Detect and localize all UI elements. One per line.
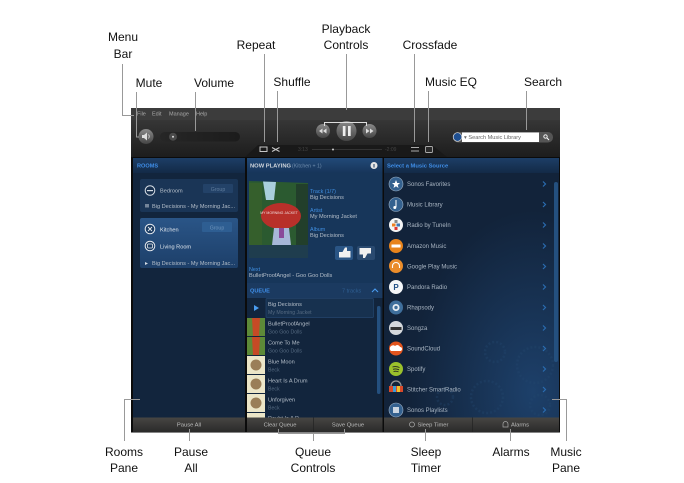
callout: sleep timer: Timer — [411, 461, 441, 475]
queue item: text: Come To Me — [268, 340, 300, 346]
next track — [249, 267, 333, 279]
track progress: -2:09 — [385, 147, 397, 153]
source list labels: Radio by TuneIn — [407, 223, 451, 229]
footer bar: Sleep Timer — [418, 422, 449, 428]
track details: Big Decisions — [310, 233, 344, 239]
callout: crossfade: Crossfade — [403, 38, 458, 52]
queue item: text: Goo Goo Dolls — [268, 330, 302, 336]
panel: music source pane — [384, 158, 559, 418]
panel: queue: 7 tracks — [342, 288, 362, 294]
callout: pause all: All — [184, 461, 198, 475]
queue item: text: Heart Is A Drum — [268, 378, 308, 384]
callout: pause all — [174, 429, 208, 475]
callout: sleep timer: Sleep — [411, 445, 442, 459]
callout: pause all: Pause — [174, 445, 208, 459]
playback controls — [316, 121, 376, 141]
room card: kitchen and living room: Big Decisions - My Morning Jac... — [152, 261, 235, 267]
track details: My Morning Jacket — [310, 214, 357, 220]
source list labels: SoundCloud — [407, 346, 440, 352]
source list labels: Google Play Music — [407, 264, 457, 270]
callout: alarms — [492, 429, 530, 459]
volume slider — [160, 132, 240, 142]
source list labels: Spotify — [407, 367, 425, 373]
callout: repeat: Repeat — [237, 38, 276, 52]
callout: shuffle: Shuffle — [273, 75, 311, 89]
menu bar: Edit — [152, 112, 162, 118]
room card: bedroom: Group — [211, 187, 225, 193]
icon: shuffle — [272, 148, 280, 152]
queue item: text: Unforgiven — [268, 398, 295, 404]
callout: menu bar — [108, 30, 138, 116]
thumbs buttons — [335, 246, 375, 260]
source list labels: Amazon Music — [407, 244, 446, 250]
callout: menu bar: Menu — [108, 30, 138, 44]
source list labels: Rhapsody — [407, 306, 434, 312]
callout: playback controls — [322, 22, 371, 126]
callout: sleep timer — [411, 429, 442, 475]
source list icons — [389, 177, 403, 417]
icon: music eq — [426, 146, 432, 152]
track details: Album — [310, 227, 326, 233]
queue item: text: Beck — [268, 406, 280, 412]
room card: kitchen and living room: Living Room — [160, 244, 191, 250]
source list labels: Stitcher SmartRadio — [407, 388, 461, 394]
callout: repeat — [237, 38, 276, 142]
room card: bedroom: Big Decisions - My Morning Jac... — [152, 204, 235, 210]
callout: shuffle — [273, 75, 311, 142]
panel: queue — [247, 283, 382, 422]
panel: music source pane: Select a Music Source — [387, 164, 449, 170]
footer bar — [133, 418, 559, 432]
callout: music pane: Music — [550, 445, 582, 459]
panel: now playing — [247, 158, 382, 283]
menu bar — [131, 108, 560, 120]
track details: Track (1/7) — [310, 189, 336, 195]
source list labels: Sonos Favorites — [407, 182, 450, 188]
next track: BulletProofAngel - Goo Goo Dolls — [249, 273, 333, 279]
menu bar: File — [137, 112, 146, 118]
app window — [131, 108, 560, 432]
callout: rooms pane — [105, 400, 143, 475]
callout: crossfade — [403, 38, 458, 142]
queue item: current: My Morning Jacket — [268, 310, 312, 316]
panel: queue: QUEUE — [250, 288, 270, 294]
callout: search: Search — [524, 75, 562, 89]
queue item: text: Goo Goo Dolls — [268, 348, 302, 354]
next track: Next — [249, 267, 261, 273]
source list labels: Pandora Radio — [407, 285, 448, 291]
source list chevrons — [543, 182, 546, 412]
track progress: 3:13 — [298, 147, 308, 153]
room card: kitchen and living room: Kitchen — [160, 228, 179, 234]
room card: kitchen and living room: Group — [210, 226, 224, 232]
queue item: current — [254, 298, 374, 318]
queue item: text: BulletProofAngel — [268, 322, 310, 328]
panel: now playing: (Kitchen + 1) — [292, 164, 322, 170]
track details: Artist — [310, 208, 323, 214]
source list labels: Sonos Playlists — [407, 408, 448, 414]
callout: volume: Volume — [194, 76, 234, 90]
callout: mute: Mute — [136, 76, 163, 90]
callout: search — [524, 75, 562, 130]
callout: rooms pane: Pane — [110, 461, 138, 475]
queue item: current: Big Decisions — [268, 302, 302, 308]
callout: playback controls: Controls — [324, 38, 368, 52]
icon: mute button — [138, 129, 154, 144]
source list icons: P — [393, 283, 399, 292]
callout: volume — [194, 76, 234, 131]
room card: kitchen and living room — [140, 218, 238, 268]
icon: repeat — [260, 147, 267, 152]
callout: playback controls: Playback — [322, 22, 371, 36]
room card: bedroom: Bedroom — [160, 188, 183, 194]
source list labels: Songza — [407, 326, 428, 332]
callout: music pane — [550, 400, 582, 475]
track progress — [298, 147, 397, 153]
callout: music eq: Music EQ — [425, 75, 477, 89]
callout: queue controls: Controls — [291, 461, 335, 475]
music source scrollbar — [554, 182, 558, 362]
callout: music pane: Pane — [552, 461, 580, 475]
callout: alarms: Alarms — [492, 445, 530, 459]
panel: rooms pane — [133, 158, 245, 418]
queue item: text — [268, 322, 310, 422]
menu bar: Help — [196, 112, 207, 118]
icon: crossfade — [411, 148, 419, 151]
source list labels — [407, 182, 461, 414]
footer bar: Alarms — [511, 422, 529, 428]
queue item: text: Beck — [268, 368, 280, 374]
queue item: text: Doubt Is A D — [268, 416, 299, 422]
queue scrollbar — [377, 306, 380, 394]
queue item: text: Blue Moon — [268, 360, 295, 366]
track details — [310, 189, 357, 239]
footer bar: Pause All — [177, 422, 201, 428]
callout: music eq — [425, 75, 477, 142]
callout: queue controls — [278, 429, 344, 475]
room card: bedroom — [140, 179, 238, 212]
toolbar — [131, 120, 560, 157]
callout: rooms pane: Rooms — [105, 445, 143, 459]
menu bar: Manage — [169, 112, 189, 118]
queue item: text: Beck — [268, 386, 280, 392]
search box — [453, 132, 553, 142]
queue item: thumbnails — [247, 318, 265, 418]
search box: ▾ Search Music Library — [464, 135, 521, 141]
footer bar: Clear Queue — [264, 422, 296, 428]
callout: queue controls: Queue — [295, 445, 331, 459]
album art: MY MORNING JACKET — [260, 211, 299, 215]
source list labels: Music Library — [407, 202, 443, 208]
callout: mute — [136, 76, 163, 137]
panel: now playing: NOW PLAYING — [250, 164, 292, 170]
track details: Big Decisions — [310, 195, 344, 201]
footer bar: Save Queue — [332, 422, 364, 428]
panel: rooms pane: ROOMS — [137, 164, 158, 170]
callout: menu bar: Bar — [114, 47, 132, 61]
